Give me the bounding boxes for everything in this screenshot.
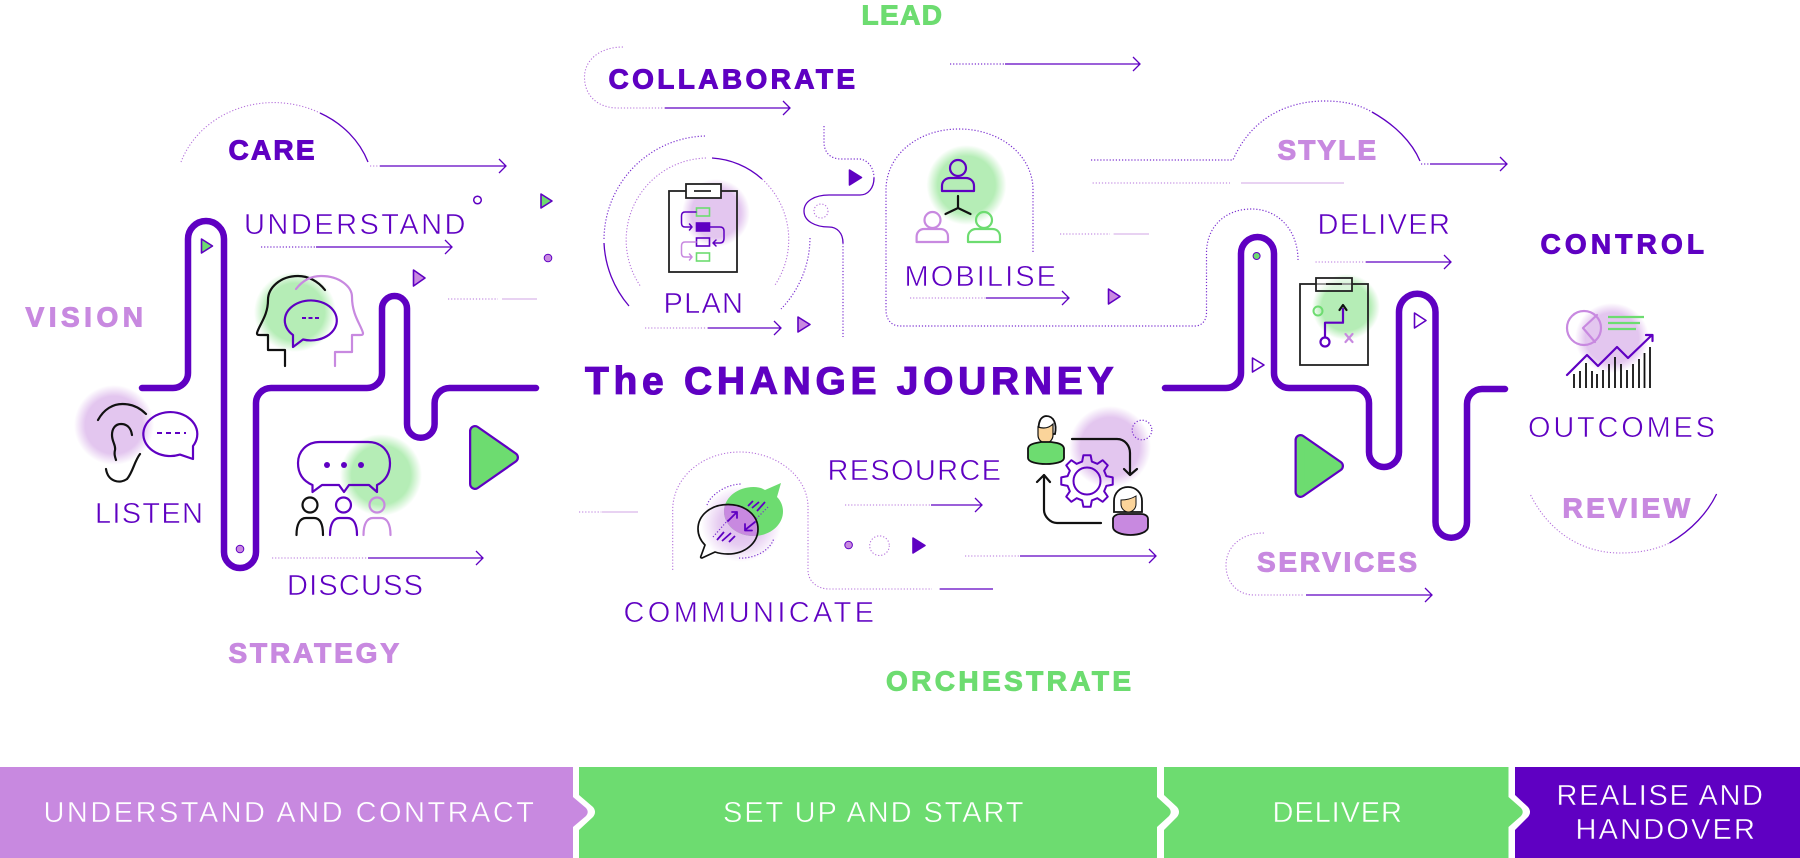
heading: services with bracket	[1226, 533, 1432, 602]
phase bar: deliver: DELIVER	[1272, 797, 1402, 829]
arrow: lower centre	[965, 549, 1156, 563]
label: discuss: DISCUSS	[287, 570, 423, 602]
label: deliver: DELIVER	[1318, 209, 1450, 241]
label: plan: PLAN	[664, 288, 743, 320]
heading: style with arch: STYLE	[1278, 134, 1376, 166]
icon: large play triangle, left	[475, 431, 513, 484]
label: listen: LISTEN	[95, 498, 203, 530]
phase bar: set up and start	[579, 767, 1171, 858]
phase bar: realise and handover: REALISE AND	[1556, 780, 1763, 812]
icon: resource cycle with gear	[1028, 406, 1152, 535]
arrow: lead	[950, 57, 1140, 71]
icon: plan clipboard flowchart	[669, 179, 750, 272]
icon: large play triangle, right	[1300, 440, 1338, 492]
heading: services with bracket: SERVICES	[1257, 546, 1417, 578]
journey path: right section	[1165, 237, 1505, 538]
plan circular arcs	[604, 136, 810, 309]
phase bar: deliver	[1164, 767, 1523, 858]
heading: vision: VISION	[26, 302, 143, 332]
icon: ear and speech bubble (listen)	[74, 385, 197, 482]
heading: lead: LEAD	[862, 0, 942, 30]
label: communicate: COMMUNICATE	[624, 597, 874, 629]
heading: style with arch	[1091, 101, 1507, 171]
icon: two heads in conversation (understand)	[254, 272, 363, 366]
label: mobilise: MOBILISE	[904, 261, 1056, 293]
communicate arch and tail	[673, 452, 993, 589]
heading: orchestrate: ORCHESTRATE	[886, 666, 1131, 696]
phase bar: set up and start: SET UP AND START	[723, 797, 1024, 829]
phase bar: understand and contract: UNDERSTAND AND CONTRACT	[44, 797, 534, 829]
phase bar: realise and handover: HANDOVER	[1576, 814, 1755, 846]
heading: control: CONTROL	[1540, 228, 1704, 260]
mobilise arch and route to deliver	[886, 129, 1298, 326]
arrow: care	[370, 159, 506, 173]
title: The CHANGE JOURNEY	[585, 360, 1114, 403]
heading: strategy: STRATEGY	[228, 638, 399, 668]
arrow: plan	[645, 321, 781, 335]
label: understand: UNDERSTAND	[244, 209, 466, 241]
heading: care with arc: CARE	[228, 134, 314, 166]
heading: collaborate with bracket	[584, 47, 855, 115]
arrow: mobilise	[910, 291, 1069, 305]
icon: communicate bubbles	[698, 483, 783, 562]
heading: collaborate with bracket: COLLABORATE	[608, 64, 855, 94]
arrow: deliver	[1316, 255, 1451, 269]
heading: care with arc	[181, 103, 368, 166]
phase bar: understand and contract	[0, 767, 588, 858]
label: outcomes: OUTCOMES	[1528, 412, 1715, 444]
arrow: understand	[261, 240, 452, 254]
heading: review with arc: REVIEW	[1562, 492, 1691, 524]
phase bar: realise and handover	[1515, 767, 1800, 858]
arrow: resource	[845, 498, 982, 512]
journey path: left section	[142, 221, 536, 568]
icon: group discussion	[296, 434, 422, 535]
connector between plan and mobilise	[804, 126, 874, 337]
icon: outcomes chart	[1567, 303, 1652, 388]
markers: small triangles and dots along the path	[202, 170, 1426, 556]
icon: mobilise team	[917, 145, 1006, 242]
icon: delivery clipboard tactics	[1300, 274, 1380, 365]
label: resource: RESOURCE	[828, 455, 1001, 487]
arrow: discuss	[272, 551, 483, 565]
heading: review with arc	[1531, 492, 1717, 553]
decorative dashes	[448, 183, 1344, 512]
